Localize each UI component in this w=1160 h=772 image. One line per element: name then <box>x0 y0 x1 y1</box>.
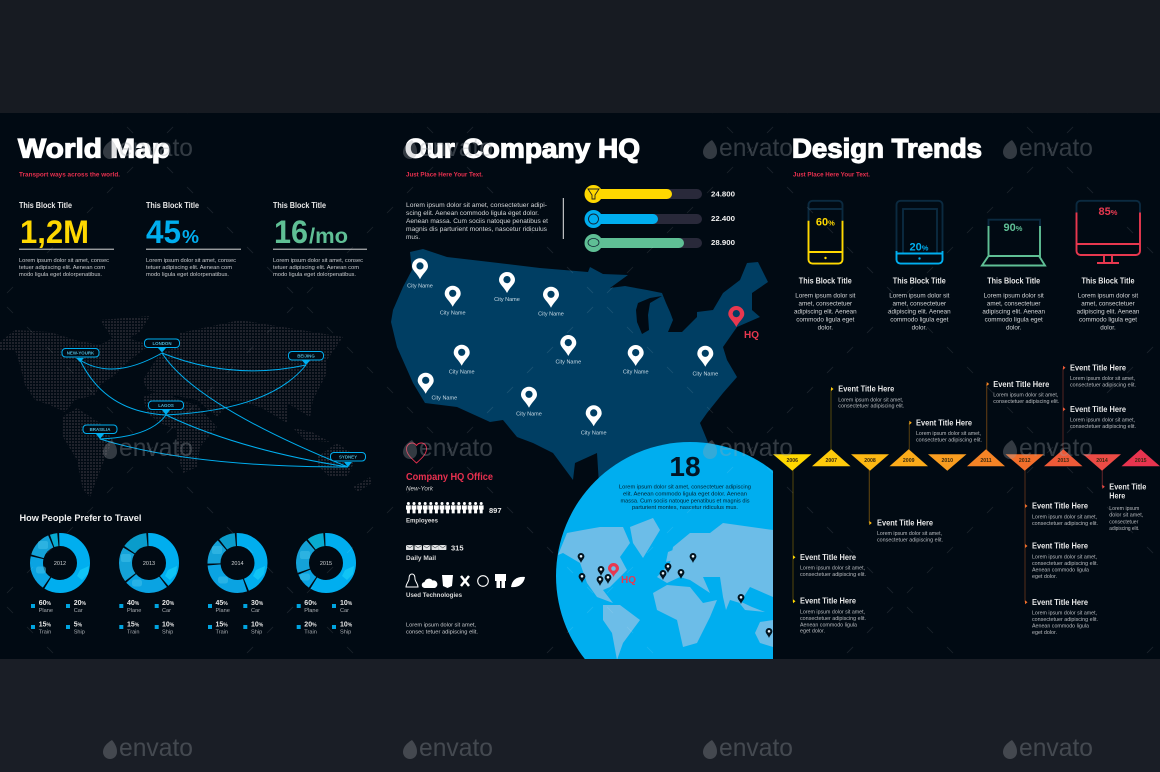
globe with offices <box>556 442 773 659</box>
icon: phone 60% <box>808 201 842 264</box>
watermarks: envato <box>719 734 793 762</box>
donut 2014 <box>212 540 265 586</box>
city pins: City Name <box>440 310 466 316</box>
watermark cross pattern <box>0 113 1160 659</box>
office city: New-York <box>406 486 434 493</box>
legend 2012 <box>31 600 86 636</box>
trend text 2: commodo ligula eget <box>890 317 949 324</box>
event 2013 a <box>1063 363 1136 388</box>
city pins: City Name <box>692 371 718 377</box>
legend 2015: Car <box>340 608 349 614</box>
city pins <box>407 258 718 437</box>
trend text 3: adipiscing elit. Aenean <box>982 309 1046 316</box>
city tag: Lagos: LAGOS <box>158 403 174 408</box>
trend text 3: dolor. <box>1006 325 1022 332</box>
event 2012 b: consectetuer adipiscing elit. <box>1032 561 1098 567</box>
event 2006 a: Lorem ipsum dolor sit amet, <box>800 565 865 571</box>
trend text 4: adipiscing elit. Aenean <box>1077 309 1140 316</box>
event 2013 b: consectetuer adipiscing elit. <box>1070 424 1136 430</box>
legend 2012: Train <box>39 630 51 636</box>
event 2012 c: Event Title Here <box>1032 598 1089 607</box>
trend text 1: Lorem ipsum dolor sit <box>795 292 856 299</box>
legend 2013: Ship <box>162 630 173 636</box>
event 2006 b: Lorem ipsum dolor sit amet, <box>800 609 865 615</box>
trend text 3: Lorem ipsum dolor sit <box>984 292 1044 299</box>
globe with offices: Lorem ipsum dolor sit amet, consectetuer adipiscing <box>619 484 751 490</box>
title: World Map: World Map <box>18 134 170 164</box>
icon: tablet 20% <box>896 201 942 264</box>
watermarks: envato <box>719 434 793 462</box>
legend 2012: Plane <box>39 608 53 614</box>
timeline years: 2010 <box>942 458 953 464</box>
employees pictogram: Employees <box>406 518 438 525</box>
intro paragraph: Aenean massa. Cum sociis natoque penatibus et <box>406 218 548 225</box>
daily mail pictogram: Daily Mail <box>406 555 436 562</box>
legend 2014: Ship <box>251 630 262 636</box>
city tag: Sydney <box>330 452 366 467</box>
watermarks: envato <box>419 734 493 762</box>
timeline years <box>773 449 1160 471</box>
legend 2013: 10% <box>162 622 175 628</box>
city tag: Beijing: BEIJING <box>297 354 315 358</box>
stat block 2: 45 <box>146 214 181 250</box>
city pins: City Name <box>407 283 433 289</box>
legend 2013: 20% <box>162 600 175 607</box>
stat block 2 <box>146 201 241 278</box>
timeline years: 2006 <box>787 458 798 464</box>
event 2013 a: Lorem ipsum dolor sit amet, <box>1070 376 1135 382</box>
dotted world map <box>0 316 372 497</box>
event 2014: Event Title <box>1109 482 1147 491</box>
event 2012 a: consectetuer adipiscing elit. <box>1032 521 1098 527</box>
event 2014: Lorem ipsum <box>1109 506 1140 512</box>
event 2012 b: Event Title Here <box>1032 542 1089 551</box>
employees pictogram <box>406 502 502 525</box>
stat block 3: Lorem ipsum dolor sit amet, consec <box>273 258 363 264</box>
timeline years: 2015 <box>1135 458 1147 464</box>
stat block 1: 1,2M <box>20 214 89 250</box>
legend 2014: 15% <box>216 622 228 628</box>
event 2008: Lorem ipsum dolor sit amet, <box>877 531 942 537</box>
event 2006 b: eget dolor. <box>800 629 825 635</box>
event 2013 b <box>1063 405 1136 430</box>
legend 2014: Plane <box>216 608 230 614</box>
globe with offices: HQ <box>621 575 636 586</box>
trend text 4: Lorem ipsum dolor sit <box>1078 292 1138 299</box>
city tag: Sydney: SYDNEY <box>339 454 357 460</box>
HQ pin: HQ <box>744 330 759 341</box>
legend 2013 <box>119 600 175 636</box>
event 2008: Event Title Here <box>877 519 934 528</box>
trend text 4: This Block Title <box>1082 276 1135 286</box>
USA map <box>391 249 768 500</box>
legend 2014 <box>208 600 264 636</box>
globe with offices: elit. Aenean commodo ligula eget dolor. Aenean <box>623 491 747 497</box>
watermarks: envato <box>119 134 193 162</box>
stat block 1: modo ligula eget dolorpenatibus. <box>19 272 102 278</box>
flight routes <box>80 353 348 467</box>
trend text 1: adipiscing elit. Aenean <box>794 309 857 316</box>
bar: 22.400 <box>584 210 735 228</box>
technology icons: Used Technologies <box>406 592 462 599</box>
stat block 2: modo ligula eget dolorpenatibus. <box>146 272 229 278</box>
office heading: Company HQ Office <box>406 472 493 483</box>
event 2012 b: Lorem ipsum dolor sit amet, <box>1032 555 1097 561</box>
timeline years: 2012 <box>1019 458 1031 464</box>
event 2012 b <box>1025 542 1098 580</box>
legend 2012: 15% <box>39 622 51 628</box>
event 2007: Event Title Here <box>838 385 895 394</box>
stat block 3: tetuer adipiscing elit. Aenean com <box>273 265 359 271</box>
legend 2015: 20% <box>304 622 317 628</box>
event 2011: Lorem ipsum dolor sit amet, <box>993 393 1059 399</box>
event 2011: consectetuer adipiscing elit. <box>993 399 1059 405</box>
event 2006 a: consectetuer adipiscing elit. <box>800 572 866 578</box>
city pins: City Name <box>449 370 475 376</box>
event 2014: dolor sit amet, <box>1109 513 1144 519</box>
city tag: London <box>144 339 180 352</box>
bar: 22.400: 22.400 <box>711 214 735 223</box>
heading: travel: How People Prefer to Travel <box>20 513 142 523</box>
event 2008 <box>869 519 943 544</box>
bar: 28.900 <box>584 234 735 252</box>
event 2012 b: eget dolor. <box>1032 574 1057 580</box>
timeline years: 2009 <box>903 458 915 464</box>
event 2009 <box>909 419 982 444</box>
donut 2013: 2013 <box>143 561 155 567</box>
event 2011 <box>987 380 1059 405</box>
trend text 3: This Block Title <box>987 276 1041 286</box>
intro paragraph: Lorem ipsum dolor sit amet, consectetuer adipi- <box>406 202 547 209</box>
subtitle: Just Place Here Your Text. <box>406 172 483 179</box>
subtitle: Transport ways across the world. <box>19 172 120 179</box>
watermarks: envato <box>419 134 493 162</box>
panel: company HQ <box>391 138 773 659</box>
city pins: City Name <box>623 370 649 376</box>
trend text 2: amet, consectetuer <box>893 301 946 308</box>
title: Our Company HQ: Our Company HQ <box>405 134 640 164</box>
globe with offices: parturient montes, nascetur ridiculus mus. <box>632 505 738 511</box>
event 2012 b: Aenean commodo ligula <box>1032 567 1089 573</box>
city tag: Brasilia: BRASILIA <box>90 427 111 432</box>
footer note: consec tetuer adipiscing elit. <box>406 630 478 636</box>
watermarks: envato <box>1019 134 1093 162</box>
legend 2014: Train <box>216 630 228 636</box>
trend text 3: amet, consectetuer <box>987 301 1040 308</box>
event 2013 a: Event Title Here <box>1070 363 1127 372</box>
panel: design trends <box>773 134 1160 636</box>
trend text 2: Lorem ipsum dolor sit <box>889 292 950 299</box>
watermarks: envato <box>419 434 493 462</box>
trend text 1: dolor. <box>818 325 833 332</box>
stat block 3: This Block Title <box>273 201 326 210</box>
event 2012 c <box>1025 598 1098 636</box>
icon: monitor 85%: 85% <box>1099 206 1118 218</box>
trend text 1 <box>794 276 857 332</box>
event 2009: consectetuer adipiscing elit. <box>916 438 982 444</box>
donut 2013 <box>121 540 177 586</box>
event 2012 c: eget dolor. <box>1032 630 1057 636</box>
event 2012 c: Lorem ipsum dolor sit amet, <box>1032 610 1097 616</box>
icon: laptop 90%: 90% <box>1004 222 1023 234</box>
legend 2012: Car <box>74 608 83 614</box>
stat block 2: Lorem ipsum dolor sit amet, consec <box>146 258 236 264</box>
intro paragraph: mus. <box>406 234 420 241</box>
event 2006 a: Event Title Here <box>800 553 857 562</box>
legend 2015: 10% <box>340 622 353 628</box>
event 2009: Event Title Here <box>916 419 973 428</box>
event 2014: Here <box>1109 492 1126 501</box>
globe with offices: massa. Cum sociis natoque penatibus et magnis dis <box>620 498 750 504</box>
trend text 1: amet, consectetuer <box>799 301 852 308</box>
trend text 2 <box>888 276 951 332</box>
legend 2013: 15% <box>127 622 140 628</box>
trend text 2: This Block Title <box>893 276 946 286</box>
footer note <box>406 623 478 636</box>
event 2007 <box>831 385 904 410</box>
legend 2015: 10% <box>340 600 353 607</box>
stat block 1: tetuer adipiscing elit. Aenean com <box>19 265 105 271</box>
daily mail pictogram: 315 <box>451 544 464 552</box>
legend 2013: Car <box>162 608 171 614</box>
timeline years: 2011 <box>980 458 992 464</box>
city tag: London: LONDON <box>152 341 172 346</box>
event 2014 <box>1102 482 1147 532</box>
panel: world map <box>0 134 372 636</box>
city pins: City Name <box>581 431 607 437</box>
daily mail pictogram <box>406 544 464 562</box>
stat block 3: /mo <box>309 225 348 248</box>
stat block 2: % <box>182 227 199 247</box>
event 2013 a: consectetuer adipiscing elit. <box>1070 382 1136 388</box>
legend 2014: 45% <box>216 600 228 607</box>
stat block 3 <box>273 201 367 278</box>
stat block 1: Lorem ipsum dolor sit amet, consec <box>19 258 109 264</box>
event 2006 b: consectetuer adipiscing elit. <box>800 616 866 622</box>
trend text 3: commodo ligula eget <box>985 317 1043 324</box>
intro paragraph <box>406 202 548 241</box>
legend 2012: Ship <box>74 630 85 636</box>
city tag: New York: NEW-YOURK <box>67 350 95 356</box>
event 2007: consectetuer adipiscing elit. <box>838 404 904 410</box>
event 2012 a: Event Title Here <box>1032 502 1089 511</box>
event 2007: Lorem ipsum dolor sit amet, <box>838 397 904 403</box>
HQ pin <box>728 306 759 341</box>
timeline stems <box>793 368 1102 602</box>
event 2012 a: Lorem ipsum dolor sit amet, <box>1032 514 1097 520</box>
stat block 1 <box>19 201 114 278</box>
legend 2015 <box>297 600 353 636</box>
legend 2014: Car <box>251 608 260 614</box>
event 2008: consectetuer adipiscing elit. <box>877 538 943 544</box>
bar: 24.800 <box>584 185 735 203</box>
trend text 1: commodo ligula eget <box>796 317 855 324</box>
event 2006 a <box>793 553 866 578</box>
legend 2014: 10% <box>251 622 264 628</box>
city pins: City Name <box>555 360 581 366</box>
watermarks: envato <box>719 134 793 162</box>
icon: tablet 20%: 20% <box>910 242 929 254</box>
legend 2012: 5% <box>74 622 83 628</box>
legend 2015: Ship <box>340 630 351 636</box>
icon: phone 60%: 60% <box>816 217 835 229</box>
legend 2014: 30% <box>251 600 264 607</box>
globe with offices: 18 <box>669 451 701 482</box>
trend text 4: commodo ligula eget <box>1079 317 1137 324</box>
intro paragraph: scing elit. Aenean commodo ligula eget dolor. <box>406 210 539 217</box>
watermarks: envato <box>1019 434 1093 462</box>
timeline years: 2007 <box>826 458 837 464</box>
event 2012 c: consectetuer adipiscing elit. <box>1032 617 1098 623</box>
event 2006 b: Aenean commodo ligula <box>800 622 857 628</box>
legend 2015: Train <box>304 630 317 636</box>
technology icons <box>406 574 525 599</box>
city pins: City Name <box>538 312 564 318</box>
city tag: Brasilia <box>83 425 117 439</box>
legend 2012: 60% <box>39 600 51 607</box>
donut 2015 <box>300 540 354 586</box>
legend 2015: 60% <box>304 600 317 607</box>
watermarks: envato <box>119 434 193 462</box>
heart icon <box>406 443 426 463</box>
event 2013 b: Lorem ipsum dolor sit amet, <box>1070 418 1135 424</box>
event 2014: consectetuer <box>1109 519 1138 525</box>
event 2011: Event Title Here <box>993 380 1050 389</box>
intro paragraph: magnis dis parturient montes, nascetur ridiculus <box>406 226 547 233</box>
timeline years: 2008 <box>864 458 876 464</box>
watermarks: envato <box>119 734 193 762</box>
donut 2012 <box>36 540 89 586</box>
icon: laptop 90% <box>982 220 1045 266</box>
stat block 2: tetuer adipiscing elit. Aenean com <box>146 265 232 271</box>
trend text 3 <box>982 276 1046 332</box>
icon: monitor 85% <box>1076 201 1140 263</box>
event 2012 a <box>1025 502 1098 527</box>
trend text 4: amet, consectetuer <box>1081 301 1135 308</box>
event 2014: adipiscing elit. <box>1109 526 1139 532</box>
city pins: City Name <box>431 396 457 402</box>
legend 2013: 40% <box>127 600 140 607</box>
trend text 1: This Block Title <box>799 276 852 286</box>
trend text 4: dolor. <box>1100 325 1116 332</box>
stat block 1: This Block Title <box>19 201 72 210</box>
watermarks: envato <box>1019 734 1093 762</box>
title: Design Trends: Design Trends <box>792 134 982 164</box>
legend 2013: Plane <box>127 608 141 614</box>
stat block 2: This Block Title <box>146 201 199 210</box>
city pins: City Name <box>516 412 542 418</box>
city tag: New York <box>62 348 99 362</box>
watermarks <box>103 134 1093 762</box>
employees pictogram: 897 <box>489 506 502 515</box>
donut 2015: 2015 <box>320 561 332 567</box>
footer note: Lorem ipsum dolor sit amet, <box>406 623 476 629</box>
subtitle: Just Place Here Your Text. <box>793 172 870 179</box>
event 2006 b <box>793 597 866 635</box>
trend text 4 <box>1077 276 1140 332</box>
event 2009: Lorem ipsum dolor sit amet, <box>916 431 981 437</box>
stat block 3: 16 <box>274 214 308 250</box>
bar: 24.800: 24.800 <box>711 190 735 198</box>
legend 2015: Plane <box>304 608 319 614</box>
city tag: Lagos <box>148 401 184 415</box>
timeline years: 2013 <box>1058 458 1069 464</box>
event 2013 b: Event Title Here <box>1070 405 1127 414</box>
donut 2014: 2014 <box>231 561 244 567</box>
bar: 28.900: 28.900 <box>711 238 735 247</box>
trend text 2: adipiscing elit. Aenean <box>888 309 951 316</box>
stat block 3: modo ligula eget dolorpenatibus. <box>273 272 356 278</box>
event 2006 b: Event Title Here <box>800 597 857 606</box>
city tag: Beijing <box>288 352 324 365</box>
legend 2013: Train <box>127 630 140 636</box>
event 2012 c: Aenean commodo ligula <box>1032 623 1089 629</box>
donut 2012: 2012 <box>54 561 66 567</box>
city pins: City Name <box>494 297 520 303</box>
timeline years: 2014 <box>1096 458 1108 464</box>
legend 2012: 20% <box>74 600 86 607</box>
trend text 2: dolor. <box>912 325 927 332</box>
